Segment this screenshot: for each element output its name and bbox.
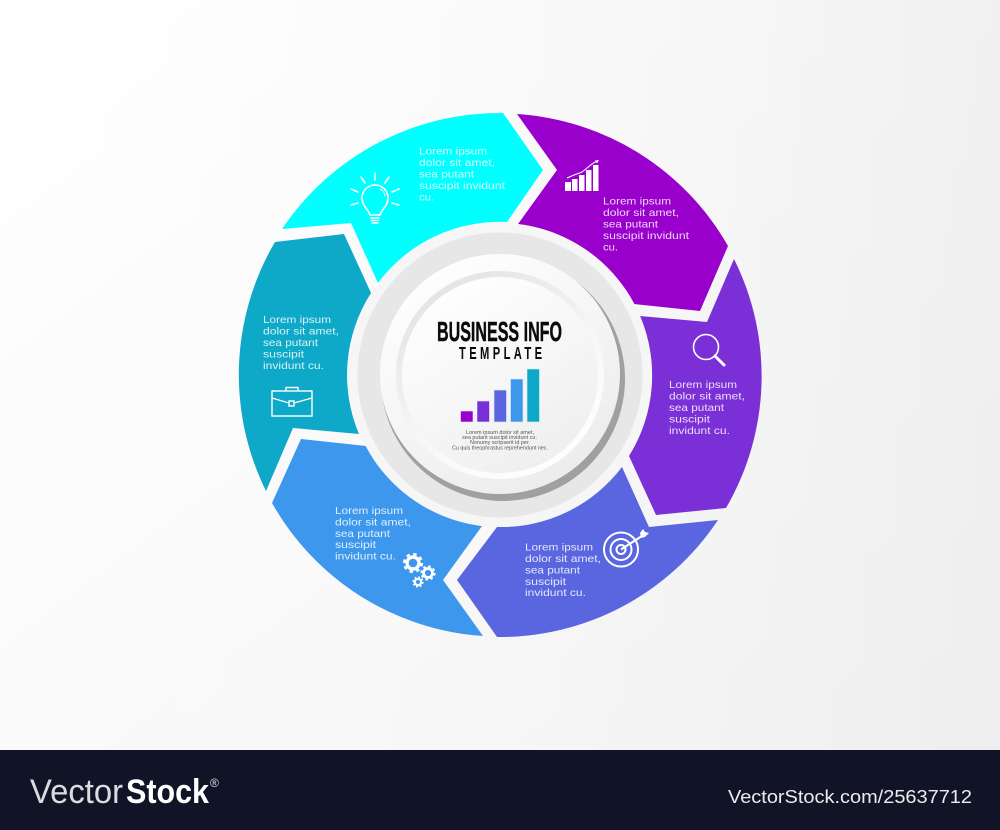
title: BUSINESS INFO [437, 316, 562, 347]
text: step 3 description: invidunt cu. [669, 426, 730, 437]
panel: step 2 magenta [517, 114, 728, 311]
text: step 3 description: suscipit [669, 414, 710, 426]
panel: step 1 cyan [282, 113, 543, 283]
text: step 2 description: dolor sit amet, [603, 208, 679, 219]
disc shadow crescent [381, 257, 625, 501]
center caption [452, 430, 548, 452]
text: step 3 description: dolor sit amet, [669, 392, 745, 402]
icon: gears [404, 554, 435, 587]
text: step 1 description: dolor sit amet, [419, 158, 495, 169]
center hub [348, 223, 652, 527]
text: step 2 description: suscipit invidunt [603, 231, 689, 242]
text: step 5 description: invidunt cu. [335, 552, 396, 562]
text: step 4 description: invidunt cu. [525, 588, 586, 599]
text: step 2 description: cu. [603, 242, 618, 254]
panel: step 6 teal [239, 234, 371, 491]
text: step 1 description: sea putant [419, 170, 474, 180]
center caption: Lorem ipsum dolor sit amet, [466, 430, 534, 436]
icon: target with dart [604, 529, 649, 566]
title: TEMPLATE [459, 343, 542, 364]
text: step 4 description: suscipit [525, 577, 566, 588]
text: step 5 description: sea putant [335, 529, 390, 540]
text: step 2 description: sea putant [603, 220, 658, 230]
bar chart [460, 369, 540, 422]
text: step 5 description: suscipit [335, 540, 376, 551]
text: step 1 description: suscipit invidunt [419, 181, 505, 192]
footer image id: VectorStock.com/25637712 [728, 786, 972, 807]
text: step 1 description: cu. [419, 192, 434, 204]
text: step 2 description: Lorem ipsum [603, 196, 671, 208]
text: step 5 description: Lorem ipsum [335, 506, 403, 517]
panel: step 3 violet [629, 259, 762, 515]
text: step 5 description: dolor sit amet, [335, 518, 411, 528]
panel: step 5 blue [272, 439, 483, 636]
text: step 5 description [335, 506, 411, 562]
title [437, 316, 562, 364]
text: step 6 description: suscipit [263, 350, 304, 360]
footer logo: Stock [126, 773, 209, 811]
text: step 4 description: sea putant [525, 566, 580, 576]
footer logo: ® [210, 776, 219, 790]
icon: magnifying glass [694, 334, 724, 365]
center caption: Nonumy scripserit id per. [470, 440, 530, 446]
center caption: Cu quis theophrastus reprehendunt nec. [452, 446, 548, 452]
text: step 4 description [525, 542, 601, 599]
text: step 4 description: dolor sit amet, [525, 554, 601, 565]
footer logo: Vector [30, 773, 123, 811]
text: step 2 description [603, 196, 689, 254]
text: step 6 description: sea putant [263, 338, 318, 349]
text: step 1 description: Lorem ipsum [419, 146, 487, 158]
text: step 6 description: invidunt cu. [263, 361, 324, 372]
footer logo [30, 773, 219, 811]
text: step 6 description [263, 315, 339, 372]
icon: briefcase [272, 388, 312, 416]
text: step 3 description: Lorem ipsum [669, 380, 737, 391]
icon: rising bar chart [565, 160, 599, 191]
text: step 3 description [669, 380, 745, 437]
footer banner [0, 750, 1000, 830]
text: step 6 description: Lorem ipsum [263, 315, 331, 326]
center caption: sea putant suscipit invidunt cu. [462, 435, 537, 441]
panel: step 4 indigo [457, 467, 718, 637]
text: step 6 description: dolor sit amet, [263, 326, 339, 338]
text: step 3 description: sea putant [669, 403, 724, 414]
icon: light bulb [351, 173, 399, 223]
text: step 1 description [419, 146, 505, 204]
text: step 4 description: Lorem ipsum [525, 542, 593, 554]
